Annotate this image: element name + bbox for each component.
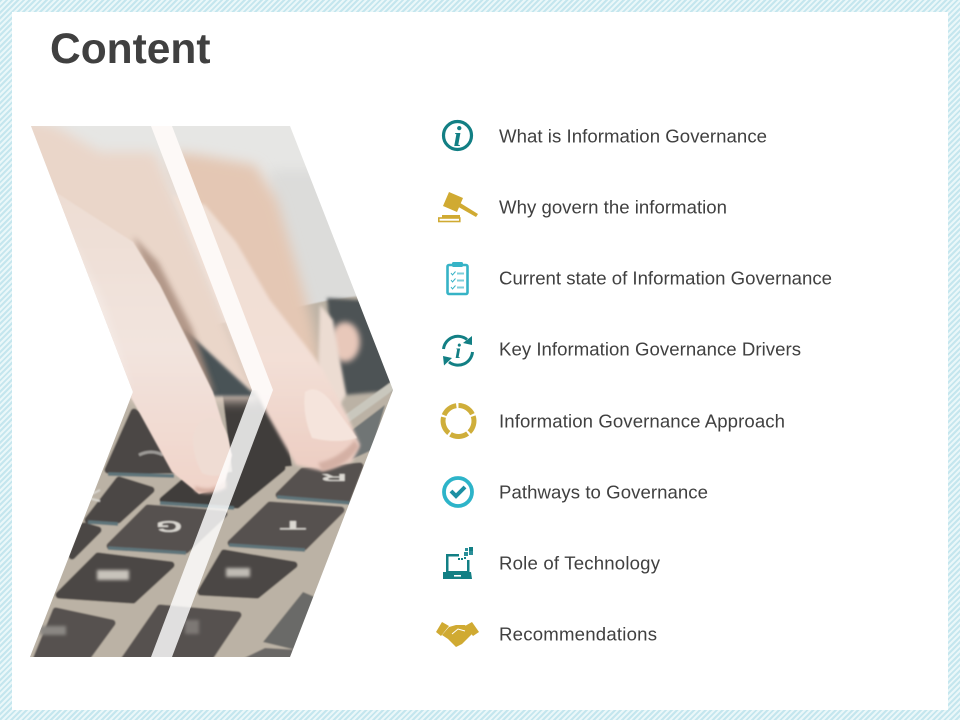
icon: clipboard checklist (448, 262, 468, 294)
shadow between fingers (133, 236, 216, 396)
item 1 (444, 121, 767, 153)
icon: check circle (444, 478, 472, 506)
wash near left edge (20, 190, 130, 395)
keyboard base: R (321, 472, 347, 483)
chevron photo: fingers on keyboard (20, 118, 400, 665)
icon: information circle (444, 121, 472, 153)
pink blurred fingertip at right (330, 322, 360, 362)
item 2 (439, 192, 727, 222)
white stripe chevron (151, 126, 273, 390)
label: Why govern the information (499, 196, 727, 218)
keyboard base: T (279, 518, 306, 532)
label: Current state of Information Governance (499, 268, 832, 288)
label: Recommendations (499, 624, 657, 644)
label: What is Information Governance (499, 126, 767, 146)
item 5 (443, 406, 785, 436)
item 3 (448, 262, 832, 294)
icon: information circle: i (453, 121, 462, 153)
icon: gavel (439, 192, 478, 222)
label: Role of Technology (499, 552, 661, 574)
icon: refresh information (443, 336, 472, 366)
item 7 (443, 547, 661, 579)
right finger (172, 195, 360, 471)
label: Pathways to Governance (499, 482, 708, 502)
third finger strip (318, 305, 346, 410)
keyboard base: G (156, 517, 182, 535)
keyboard base (20, 290, 400, 660)
icon: laptop with data blocks (443, 547, 473, 579)
keys visible between fingers (183, 328, 256, 396)
right hand tan blob (168, 148, 319, 362)
icon: segmented circle (443, 406, 474, 436)
item 6 (444, 478, 708, 506)
hand upper skin (20, 118, 262, 400)
item 8 (436, 622, 657, 647)
item 4 (443, 336, 801, 366)
label: Key Information Governance Drivers (499, 338, 801, 360)
label: Information Governance Approach (499, 410, 785, 432)
title: Content (50, 26, 211, 73)
left finger (58, 194, 232, 495)
icon: handshake (436, 622, 479, 647)
icon: refresh information: i (455, 339, 461, 363)
